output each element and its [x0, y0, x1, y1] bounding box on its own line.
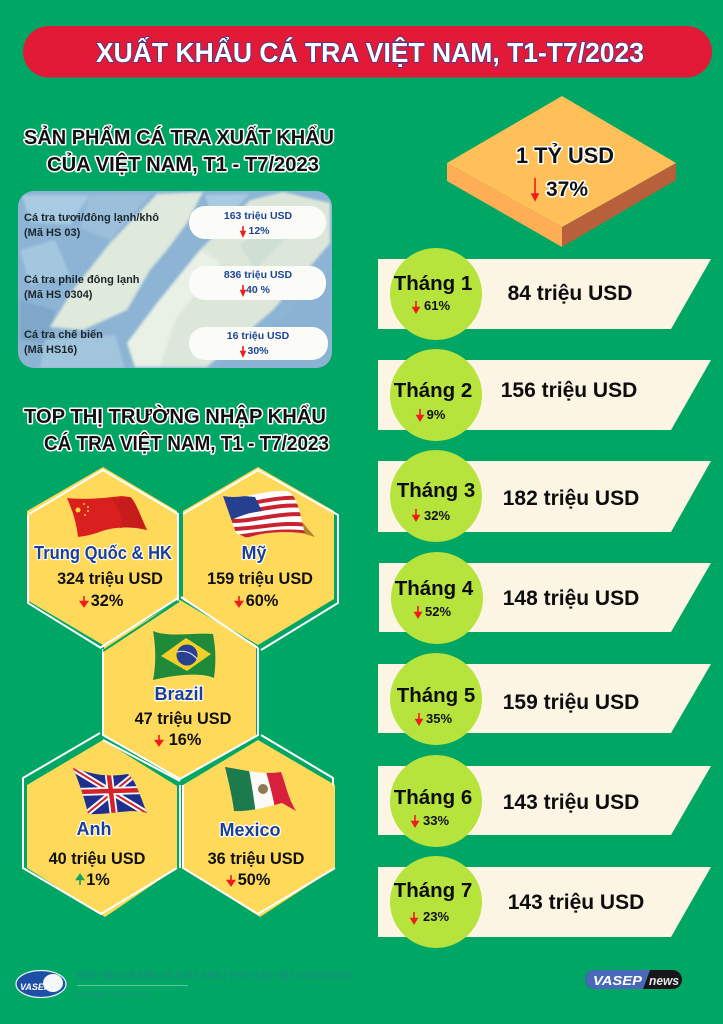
panel: market hexagons [23, 467, 338, 917]
hexagon: China and Hong Kong: 324 triệu USD [57, 570, 163, 588]
row: fresh/frozen/dried [24, 206, 326, 239]
footer: VASEP news logo: news [649, 973, 679, 988]
hexagon: Brazil: 47 triệu USD [135, 710, 232, 728]
hexagon: UK: 40 triệu USD [49, 850, 146, 868]
month 4 row: Tháng 4 [395, 577, 474, 600]
hexagon: Mexico: 50% [238, 871, 271, 889]
hexagon: China and Hong Kong [27, 467, 178, 648]
hexagon: USA: 159 triệu USD [207, 570, 313, 588]
hexagon: China and Hong Kong: 32% [91, 592, 124, 610]
panel: product categories over fish fillet photo [18, 191, 332, 368]
month 3 row: 182 triệu USD [503, 487, 639, 510]
row: frozen fillet: (Mã HS 0304) [24, 289, 93, 301]
month 6 row: 143 triệu USD [503, 791, 639, 814]
row: fresh/frozen/dried: Cá tra tươi/đông lạnh/khô [24, 212, 159, 224]
row: fresh/frozen/dried: (Mã HS 03) [24, 227, 81, 239]
month 5 row: 35% [426, 711, 452, 726]
month 6 row: 33% [423, 813, 449, 828]
flag: China [67, 496, 147, 537]
month 5 row: 159 triệu USD [503, 691, 639, 714]
heading: top markets [24, 404, 329, 455]
icon: VASEP logo [16, 970, 66, 998]
hexagon: USA [183, 467, 338, 650]
row: processed: 16 triệu USD [227, 330, 290, 342]
month 6 row: Tháng 6 [394, 786, 472, 809]
hexagon: Mexico [180, 735, 335, 917]
month 2 row: 9% [427, 407, 446, 422]
hexagon: Brazil: 16% [169, 731, 202, 749]
hexagon: Mexico: 36 triệu USD [208, 850, 305, 868]
hexagon: Mexico: Mexico [219, 820, 281, 840]
month 1 row: 61% [424, 298, 450, 313]
hexagon: USA: 60% [246, 592, 279, 610]
month 5 row [378, 653, 711, 745]
heading: top markets: CÁ TRA VIỆT NAM, T1 - T7/2023 [44, 431, 329, 455]
website: vasep.com.vn [77, 989, 149, 999]
association name: HIỆP HỘI CHẾ BIẾN VÀ XUẤT KHẨU THỦY SẢN VIỆT NAM (VASEP) [77, 970, 353, 982]
row: fresh/frozen/dried: 12% [248, 225, 270, 237]
month 2 row: 156 triệu USD [501, 379, 637, 402]
title banner [23, 26, 712, 78]
month 1 row: 84 triệu USD [508, 282, 632, 305]
hexagon: China and Hong Kong: Trung Quốc & HK [34, 543, 172, 563]
heading: top markets: TOP THỊ TRƯỜNG NHẬP KHẨU [24, 404, 326, 428]
footer: VASEP news logo [585, 970, 682, 989]
footer: VASEP association logo and name [16, 970, 353, 999]
hexagon: Brazil: Brazil [154, 684, 204, 704]
row: processed: (Mã HS16) [24, 344, 78, 356]
photo: fish fillets on ice [18, 191, 332, 368]
row: processed: 30% [247, 345, 269, 357]
title banner: XUẤT KHẨU CÁ TRA VIỆT NAM, T1-T7/2023 [96, 37, 644, 68]
row: frozen fillet: Cá tra phile đông lạnh [24, 274, 140, 286]
hexagon: UK [23, 733, 180, 917]
row: frozen fillet: 40 % [246, 284, 271, 296]
month 5 row: Tháng 5 [397, 684, 475, 707]
heading: products: CỦA VIỆT NAM, T1 - T7/2023 [47, 152, 319, 176]
month 7 row: 23% [423, 909, 449, 924]
month 3 row: 32% [424, 508, 450, 523]
month 1 row [378, 248, 711, 340]
icon: VASEP logo: VASEP [20, 982, 51, 992]
month 7 row: Tháng 7 [394, 879, 472, 902]
month 1 row: Tháng 1 [394, 272, 472, 295]
flag: Mexico [225, 767, 296, 812]
month 7 row: 143 triệu USD [508, 891, 644, 914]
total export value block: 37% [546, 178, 588, 201]
heading: products: SẢN PHẨM CÁ TRA XUẤT KHẨU [24, 126, 334, 149]
month 4 row: 52% [425, 604, 451, 619]
row: frozen fillet: 836 triệu USD [224, 269, 293, 281]
month 7 row [378, 856, 711, 948]
row: fresh/frozen/dried: 163 triệu USD [224, 210, 293, 222]
total export value block [447, 96, 676, 247]
month 3 row: Tháng 3 [397, 479, 475, 502]
month 6 row [378, 755, 711, 847]
hexagon: UK: Anh [76, 819, 112, 839]
month 3 row [378, 450, 711, 542]
hexagon: USA: Mỹ [241, 543, 267, 563]
row: frozen fillet [24, 266, 326, 301]
heading: products [24, 126, 334, 176]
flag: USA [223, 490, 315, 538]
flag: Brazil [153, 631, 215, 680]
month 4 row [379, 552, 711, 644]
flag: UK [73, 768, 147, 814]
row: processed: Cá tra chế biến [24, 329, 103, 341]
hexagon: Brazil [100, 597, 258, 779]
hexagon: UK: 1% [86, 871, 110, 889]
month 2 row: Tháng 2 [394, 379, 472, 402]
month 4 row: 148 triệu USD [503, 587, 639, 610]
row: processed [24, 327, 328, 360]
total export value block: 1 TỶ USD [516, 143, 614, 168]
month 2 row [378, 349, 711, 441]
footer: VASEP news logo: VASEP [593, 973, 642, 988]
